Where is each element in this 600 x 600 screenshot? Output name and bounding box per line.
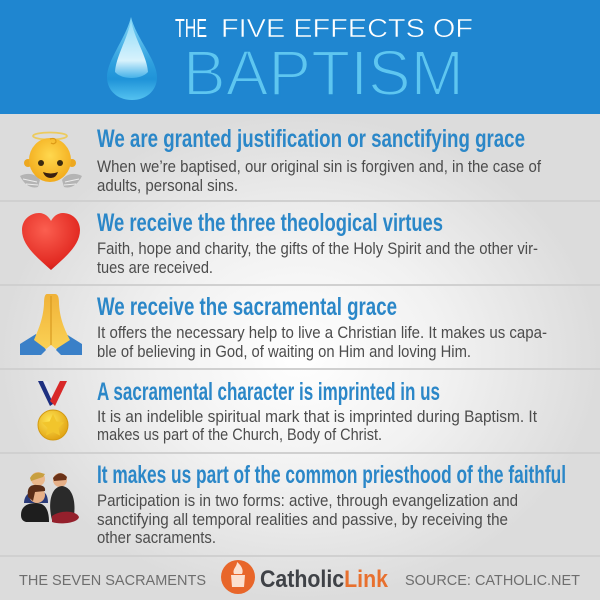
text block: makes us part of the Church, Body of Christ. xyxy=(97,425,382,444)
panel: effect 3 xyxy=(20,293,547,361)
panel: effect 5 xyxy=(21,461,566,547)
text block: When we’re baptised, our original sin is forgiven and, in the case of xyxy=(97,157,541,176)
text block: Participation is in two forms: active, through evangelization and xyxy=(97,491,518,510)
text block xyxy=(97,239,538,277)
panel: effect 4 xyxy=(38,378,537,444)
text block: adults, personal sins. xyxy=(97,176,238,195)
title: BAPTISM xyxy=(183,37,464,109)
header band xyxy=(0,0,600,114)
text block: other sacraments. xyxy=(97,528,216,547)
text block xyxy=(97,407,537,444)
logo wordmark: CatholicLink xyxy=(260,566,389,593)
icon: CatholicLink logo xyxy=(221,560,255,594)
icon: baby angel xyxy=(20,132,82,187)
heading: We receive the sacramental grace xyxy=(97,293,397,321)
text block: ble of believing in God, of waiting on Him and loving Him. xyxy=(97,342,471,361)
dividers xyxy=(0,200,600,557)
title: THE xyxy=(175,13,207,43)
text block xyxy=(97,491,518,547)
icon: water drop xyxy=(107,17,157,100)
panel: effect 2 xyxy=(22,209,538,277)
icon: heart xyxy=(22,213,80,270)
text block: tues are received. xyxy=(97,258,213,277)
text block xyxy=(97,157,541,195)
text block xyxy=(97,323,547,361)
panel: effect 1 xyxy=(20,125,541,195)
icon: medal xyxy=(38,381,68,440)
text block: sanctifying all temporal realities and passive, by receiving the xyxy=(97,510,508,529)
text block: Faith, hope and charity, the gifts of the Holy Spirit and the other vir- xyxy=(97,239,538,258)
title: FIVE EFFECTS OF xyxy=(221,13,473,43)
text block: It is an indelible spiritual mark that is imprinted during Baptism. It xyxy=(97,407,537,426)
footer source label: SOURCE: CATHOLIC.NET xyxy=(405,572,580,589)
icon: praying hands xyxy=(20,294,82,355)
heading: A sacramental character is imprinted in us xyxy=(97,378,440,406)
heading: We receive the three theological virtues xyxy=(97,209,443,237)
icon: group of people xyxy=(21,472,79,523)
text block: It offers the necessary help to live a Christian life. It makes us capa- xyxy=(97,323,547,342)
footer xyxy=(19,560,580,594)
footer left label: THE SEVEN SACRAMENTS xyxy=(19,572,206,589)
